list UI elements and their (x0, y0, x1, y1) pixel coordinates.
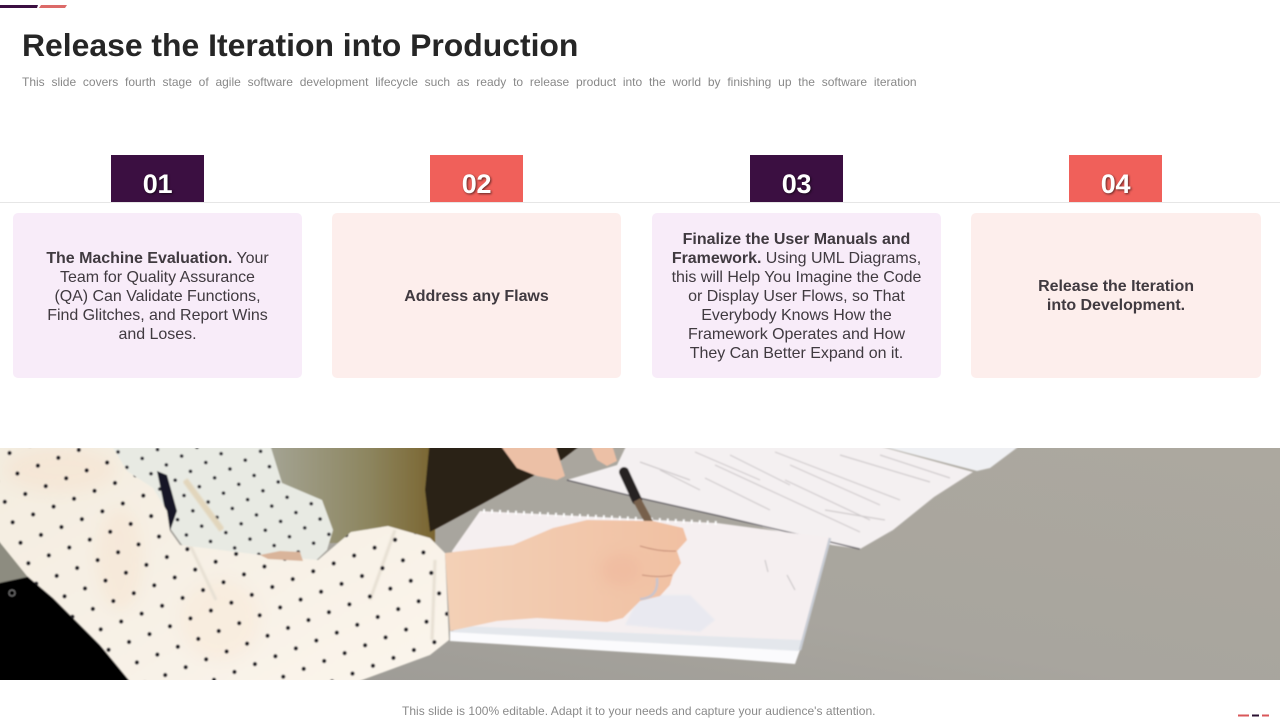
card 3: user manuals: or Display User Flows, so That (688, 288, 905, 304)
card 2: address flaws: Address any Flaws (404, 288, 549, 304)
card 2: address flaws (332, 213, 621, 378)
title: Release the Iteration into Production (22, 27, 578, 63)
card 1: machine evaluation: The Machine Evaluation. Your (46, 250, 269, 266)
horizontal divider (0, 202, 1280, 203)
badge 01 (111, 155, 204, 202)
small ring mark (9, 590, 15, 596)
card 3: user manuals: Framework Operates and How (688, 326, 905, 342)
table (0, 448, 1280, 680)
badge 04 (1069, 155, 1162, 202)
pen (624, 472, 650, 524)
badge 01: 01 (143, 169, 172, 199)
blouse sleeve (0, 438, 449, 690)
wall (265, 438, 435, 543)
card 1: machine evaluation: (QA) Can Validate Functions, (54, 288, 261, 304)
card 3: user manuals: this will Help You Imagine the Code (672, 268, 921, 286)
notebook (450, 511, 830, 664)
badge 04: 04 (1101, 169, 1130, 199)
badge 02 (430, 155, 523, 202)
subtitle: This slide covers fourth stage of agile software development lifecycle such as ready to release product into the world by finishing up the software iteration (22, 75, 917, 89)
footer note: This slide is 100% editable. Adapt it to your needs and capture your audience's attention. (402, 704, 876, 718)
card 3: user manuals (652, 213, 941, 378)
card 4: release: Release the Iteration (1038, 278, 1194, 295)
black lower area (0, 570, 150, 690)
writing hand (445, 520, 687, 631)
badge 03: 03 (782, 169, 811, 199)
photo: hand writing in notebook (0, 448, 1280, 680)
badge 03 (750, 155, 843, 202)
card 3: user manuals: Finalize the User Manuals and (683, 230, 910, 248)
card 3: user manuals: Framework. Using UML Diagrams, (672, 250, 921, 266)
card 1: machine evaluation: and Loses. (118, 326, 196, 342)
dark clothing (425, 438, 590, 532)
lower left gray cloth (0, 530, 33, 585)
upper fingers (495, 438, 617, 480)
card 1: machine evaluation: Find Glitches, and Report Wins (47, 306, 268, 324)
papers (567, 438, 1030, 549)
card 4: release: into Development. (1047, 297, 1185, 314)
top accent bars (0, 5, 67, 8)
badge 02: 02 (462, 169, 491, 199)
footer accent bars (1238, 714, 1269, 716)
blouse back (100, 438, 333, 570)
card 3: user manuals: Everybody Knows How the (701, 306, 892, 324)
card 1: machine evaluation (13, 213, 302, 378)
card 4: release (971, 213, 1261, 378)
card 3: user manuals: They Can Better Expand on it. (690, 344, 903, 362)
card 1: machine evaluation: Team for Quality Assurance (60, 268, 255, 286)
